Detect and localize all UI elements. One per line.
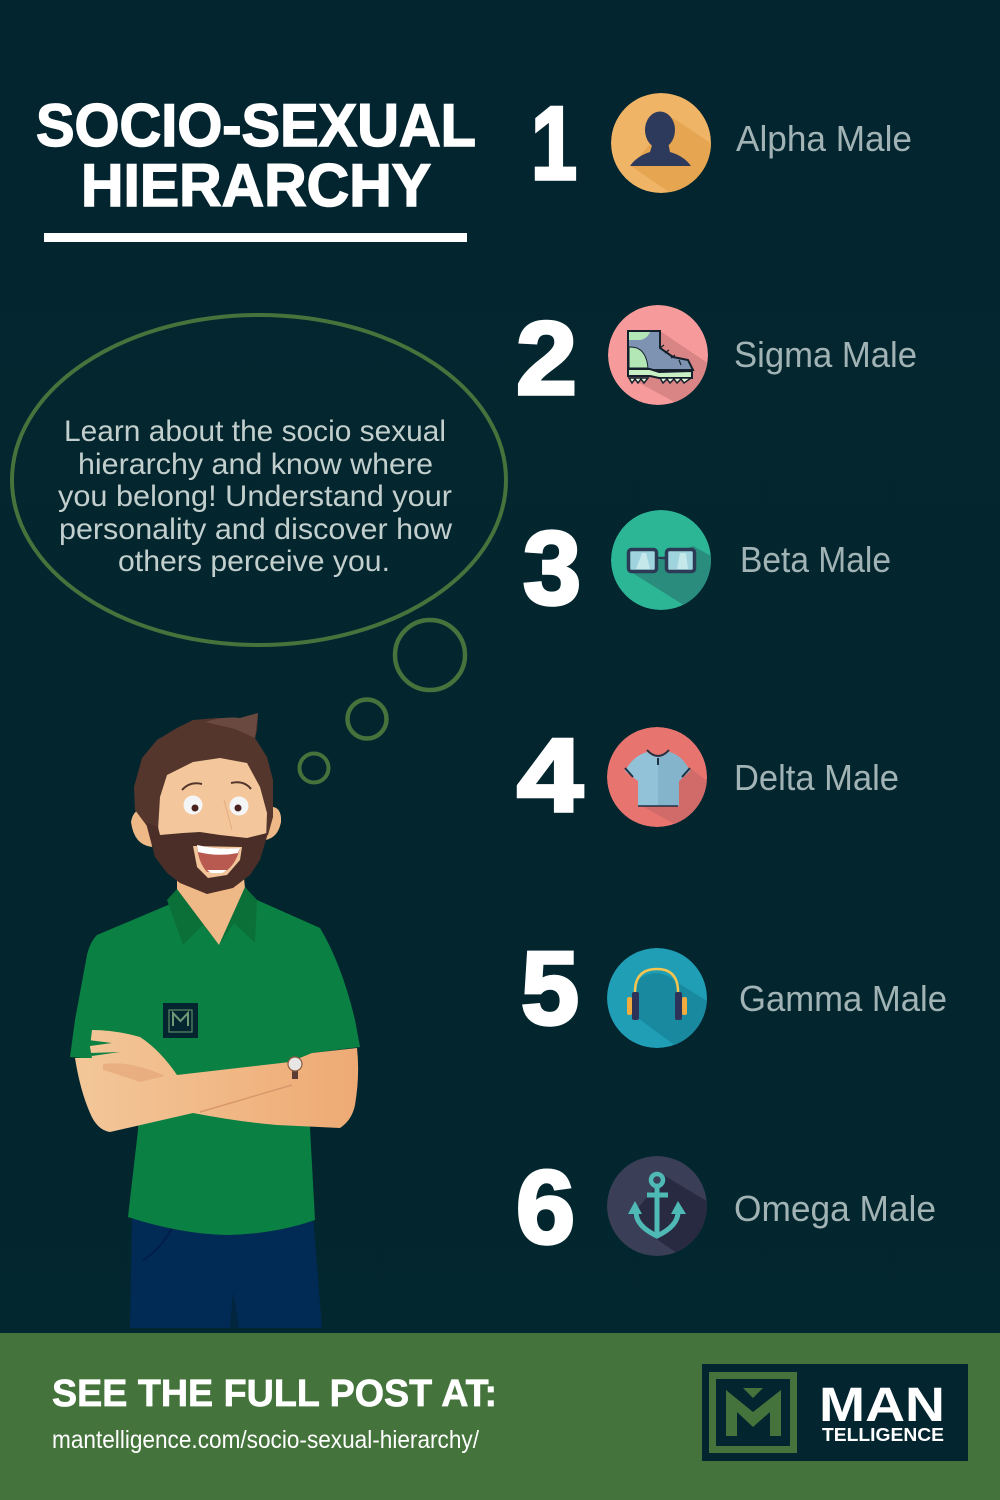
title <box>36 92 476 242</box>
item 3: Beta Male: Beta Male <box>740 539 891 580</box>
item 5: Gamma Male: 5 <box>521 931 579 1047</box>
footer band <box>0 1333 1000 1500</box>
icon: t-shirt <box>607 727 712 830</box>
thought bubble: others perceive you. <box>118 545 390 578</box>
item 1: Alpha Male: Alpha Male <box>736 118 912 159</box>
hair <box>134 713 273 835</box>
watch <box>288 1057 302 1079</box>
thought bubble: personality and discover how <box>59 513 452 546</box>
collar <box>167 887 257 945</box>
icon: boot <box>608 305 708 405</box>
face <box>158 758 267 842</box>
thought bubble: you belong! Understand your <box>58 480 452 513</box>
ears <box>131 809 152 847</box>
item 1: Alpha Male: 1 <box>531 86 577 202</box>
item 5: Gamma Male: Gamma Male <box>739 978 947 1019</box>
item 6: Omega Male <box>518 1156 934 1256</box>
item 2: Sigma Male: 2 <box>516 301 577 417</box>
item 3: Beta Male <box>523 510 890 610</box>
item 4: Delta Male: Delta Male <box>734 757 899 798</box>
arms <box>75 1030 358 1132</box>
item 6: Omega Male: Omega Male <box>734 1188 936 1229</box>
item 6: Omega Male: 6 <box>516 1150 575 1266</box>
trousers <box>130 1215 322 1328</box>
icon: anchor <box>607 1156 710 1256</box>
thought bubble <box>12 315 506 782</box>
item 2: Sigma Male <box>518 305 916 405</box>
item 2: Sigma Male: Sigma Male <box>734 334 917 375</box>
mouth <box>193 845 242 878</box>
item 3: Beta Male: 3 <box>523 511 581 627</box>
logo: Mantelligence: MAN <box>819 1379 945 1432</box>
item 4: Delta Male: 4 <box>517 718 583 834</box>
beard <box>146 823 268 894</box>
shirt logo <box>163 1003 198 1038</box>
item 4: Delta Male <box>516 727 898 827</box>
icon: headphones <box>607 948 707 1048</box>
item 5: Gamma Male <box>522 948 946 1048</box>
icon: person silhouette <box>611 93 711 193</box>
logo: Mantelligence <box>702 1364 968 1461</box>
item 1: Alpha Male <box>534 93 910 193</box>
icon: glasses <box>611 510 715 610</box>
logo: Mantelligence: TELLIGENCE <box>822 1425 944 1445</box>
neck <box>177 868 245 945</box>
footer band: mantelligence.com/socio-sexual-hierarchy/ <box>52 1426 479 1454</box>
thought bubble: hierarchy and know where <box>78 448 433 481</box>
shirt <box>70 888 360 1235</box>
illustration: bearded man in green polo <box>70 713 360 1328</box>
eyes and brows <box>182 782 251 830</box>
footer band: SEE THE FULL POST AT: <box>52 1373 497 1415</box>
title: SOCIO-SEXUAL <box>36 92 476 159</box>
thought bubble: Learn about the socio sexual <box>64 415 446 448</box>
title: HIERARCHY <box>81 152 431 219</box>
